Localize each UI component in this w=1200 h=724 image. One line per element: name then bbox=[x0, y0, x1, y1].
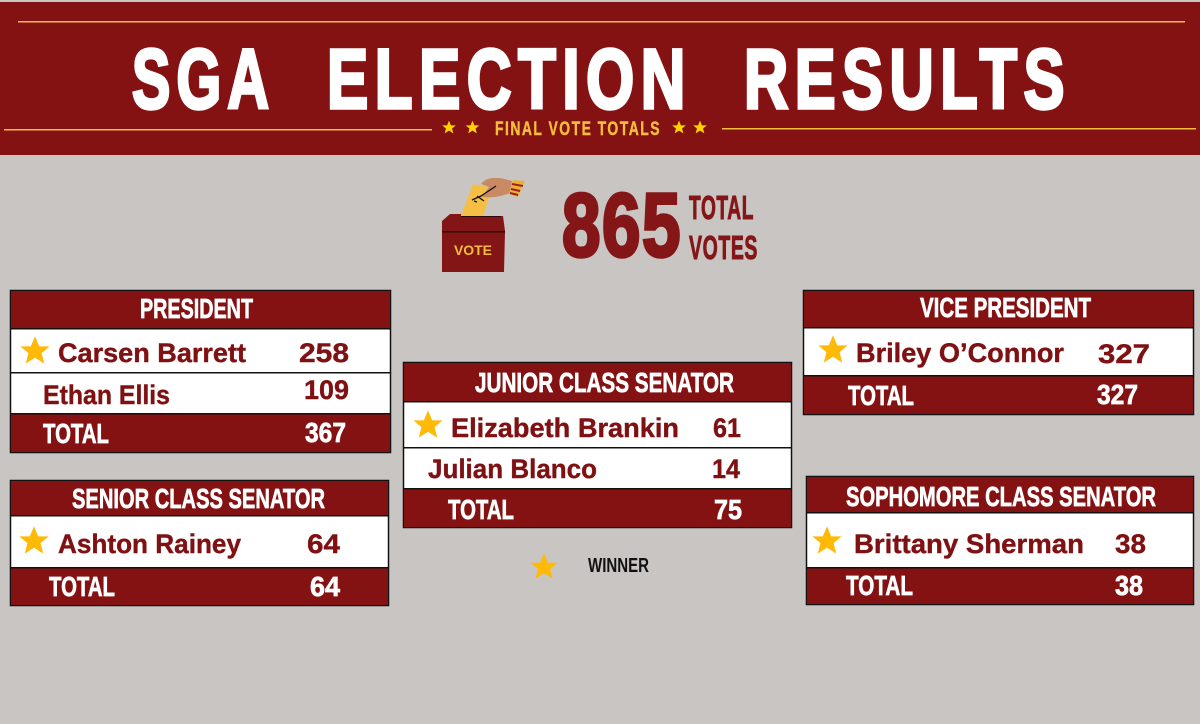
panel: sophomore class senator bbox=[806, 476, 1194, 604]
title: RESULTS bbox=[744, 32, 1071, 126]
panel: junior class senator: TOTAL bbox=[448, 494, 514, 525]
panel: vice president: 327 bbox=[1098, 339, 1150, 369]
panel: senior class senator: Ashton Rainey bbox=[58, 529, 241, 559]
total votes count: 865 bbox=[562, 176, 682, 276]
panel: junior class senator: 61 bbox=[713, 413, 741, 443]
icon: ballot box with hand: VOTE bbox=[454, 242, 492, 258]
total votes count: TOTAL bbox=[689, 189, 754, 226]
panel: sophomore class senator: 38 bbox=[1115, 570, 1143, 601]
panel: president bbox=[10, 290, 390, 452]
panel: junior class senator: Elizabeth Brankin bbox=[451, 413, 679, 443]
panel: junior class senator: 75 bbox=[714, 494, 742, 525]
legend: winner bbox=[530, 553, 649, 579]
panel: president: 109 bbox=[304, 375, 349, 405]
panel: vice president bbox=[804, 290, 1194, 414]
header banner bbox=[0, 2, 1200, 155]
panel: senior class senator: 64 bbox=[307, 529, 340, 559]
panel: junior class senator: 14 bbox=[712, 454, 740, 484]
subtitle: final vote totals: FINAL VOTE TOTALS bbox=[495, 119, 661, 140]
panel: president: 258 bbox=[299, 338, 349, 368]
panel: president: PRESIDENT bbox=[140, 293, 253, 324]
panel: president: Ethan Ellis bbox=[43, 380, 170, 410]
panel: senior class senator: 64 bbox=[310, 571, 340, 602]
panel: junior class senator: JUNIOR CLASS SENATOR bbox=[475, 367, 734, 398]
panel: vice president: Briley O’Connor bbox=[856, 338, 1064, 368]
panel: sophomore class senator: TOTAL bbox=[846, 570, 913, 601]
panel: senior class senator bbox=[10, 480, 388, 606]
legend: winner: WINNER bbox=[588, 555, 649, 577]
panel: vice president: 327 bbox=[1097, 379, 1138, 410]
panel: senior class senator: SENIOR CLASS SENATOR bbox=[72, 483, 325, 514]
panel: sophomore class senator: Brittany Sherman bbox=[854, 529, 1084, 559]
panel: vice president: VICE PRESIDENT bbox=[920, 292, 1091, 323]
title: SGA bbox=[132, 32, 275, 126]
panel: president: 367 bbox=[305, 417, 346, 448]
panel: vice president: TOTAL bbox=[848, 380, 914, 411]
panel: president: Carsen Barrett bbox=[58, 338, 246, 368]
panel: junior class senator: Julian Blanco bbox=[428, 454, 597, 484]
title: ELECTION bbox=[327, 32, 692, 126]
panel: junior class senator bbox=[404, 362, 792, 528]
title bbox=[132, 32, 1071, 126]
total votes count: VOTES bbox=[689, 229, 758, 266]
panel: president: TOTAL bbox=[43, 418, 109, 449]
panel: senior class senator: TOTAL bbox=[49, 571, 115, 602]
icon: ballot box with hand bbox=[442, 178, 525, 272]
panel: sophomore class senator: 38 bbox=[1115, 529, 1146, 559]
